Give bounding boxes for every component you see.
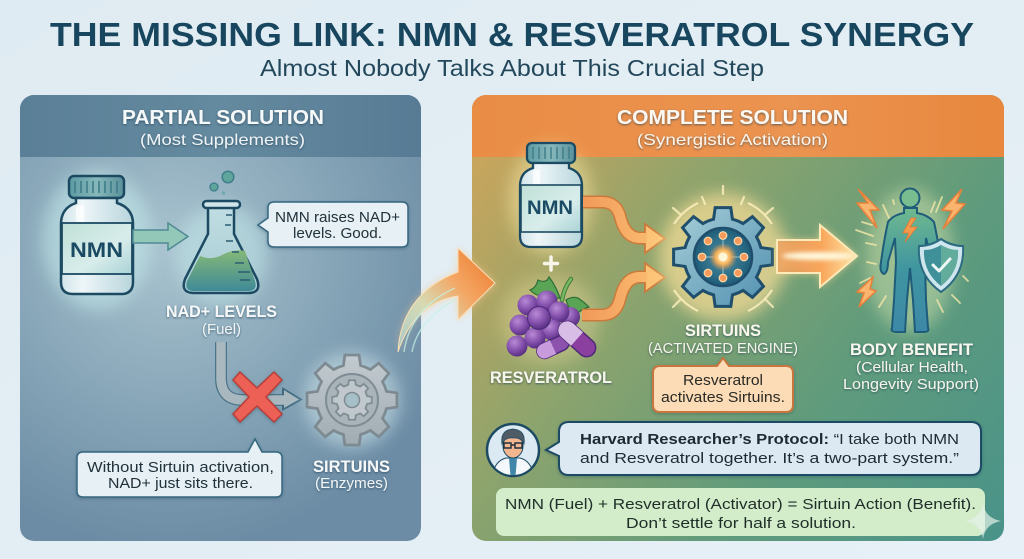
arrow: partial to complete solution bbox=[398, 248, 497, 352]
callout: without sirtuin activation: NAD+ just sits there. bbox=[108, 476, 253, 492]
sparkle bbox=[965, 503, 1001, 539]
callout: Harvard researcher's protocol: Harvard Researcher’s Protocol: “I take both NMN bbox=[580, 431, 959, 448]
panel header: complete solution bbox=[472, 95, 1004, 157]
arrow: NMN to sirtuins bbox=[583, 202, 665, 253]
callout: NMN raises NAD+: NMN raises NAD+ bbox=[275, 210, 400, 226]
icon: body with shield and energy bbox=[856, 188, 968, 332]
label: sirtuins activated engine: (ACTIVATED ENGINE) bbox=[648, 341, 798, 357]
icon: inactive sirtuin gear bbox=[304, 352, 400, 448]
label: body benefit: BODY BENEFIT bbox=[850, 341, 973, 359]
title bbox=[50, 16, 974, 81]
callout: summary equation: Don’t settle for half a solution. bbox=[626, 515, 856, 532]
panel header: complete solution: (Synergistic Activation) bbox=[637, 132, 828, 149]
callout: summary equation: NMN (Fuel) + Resveratrol (Activator) = Sirtuin Action (Benefit). bbox=[505, 496, 976, 513]
arrow: resveratrol to sirtuins bbox=[582, 263, 665, 315]
panel header: partial solution: PARTIAL SOLUTION bbox=[122, 106, 324, 129]
panel: complete solution bbox=[472, 95, 1004, 541]
label: sirtuins enzymes bbox=[313, 458, 390, 492]
callout: NMN raises NAD+ bbox=[258, 202, 408, 247]
panel: partial solution bbox=[20, 95, 421, 541]
label: sirtuins enzymes: SIRTUINS bbox=[313, 458, 390, 476]
icon: NMN bottle: NMN bbox=[527, 198, 573, 219]
label: sirtuins activated engine bbox=[648, 322, 798, 357]
callout: resveratrol activates sirtuins: activates Sirtuins. bbox=[661, 390, 785, 406]
arrow: NMN to NAD+ bbox=[133, 223, 188, 250]
icon: grapes and capsules bbox=[506, 277, 599, 361]
icon: red X bbox=[233, 372, 282, 422]
arrow: sirtuins to body benefit bbox=[777, 225, 857, 287]
label: sirtuins enzymes: (Enzymes) bbox=[315, 476, 388, 492]
label: resveratrol: RESVERATROL bbox=[490, 368, 612, 387]
label: NAD+ levels: NAD+ LEVELS bbox=[166, 303, 277, 321]
arrow: blocked path to sirtuins bbox=[221, 342, 303, 411]
callout: without sirtuin activation bbox=[77, 439, 282, 497]
label: body benefit: Longevity Support) bbox=[843, 377, 979, 393]
callout: without sirtuin activation: Without Sirtuin activation, bbox=[87, 460, 274, 476]
callout: resveratrol activates sirtuins: Resveratrol bbox=[683, 373, 763, 389]
main heading: THE MISSING LINK: NMN & RESVERATROL SYNERGY bbox=[50, 16, 974, 53]
callout: summary equation bbox=[496, 488, 985, 536]
plus sign bbox=[544, 257, 558, 270]
icon: flask with NAD+ bbox=[184, 171, 258, 293]
icon: activated sirtuin gear bbox=[659, 186, 787, 321]
panel header: complete solution: COMPLETE SOLUTION bbox=[617, 106, 848, 129]
label: NAD+ levels: (Fuel) bbox=[202, 322, 241, 338]
callout: resveratrol activates sirtuins bbox=[653, 358, 793, 412]
label: NAD+ levels bbox=[166, 303, 277, 338]
label: body benefit bbox=[843, 341, 979, 393]
subtitle: Almost Nobody Talks About This Crucial Step bbox=[260, 55, 764, 81]
icon: researcher avatar bbox=[487, 424, 539, 478]
icon: NMN bottle bbox=[61, 176, 133, 294]
callout: NMN raises NAD+: levels. Good. bbox=[293, 226, 382, 242]
label: sirtuins activated engine: SIRTUINS bbox=[685, 322, 761, 340]
panel header: partial solution bbox=[20, 95, 421, 157]
callout: Harvard researcher's protocol bbox=[546, 422, 981, 475]
label: body benefit: (Cellular Health, bbox=[856, 360, 968, 376]
panel header: partial solution: (Most Supplements) bbox=[140, 132, 305, 149]
icon: NMN bottle: NMN bbox=[70, 238, 123, 262]
icon: NMN bottle bbox=[520, 143, 582, 247]
callout: Harvard researcher's protocol: and Resveratrol together. It’s a two-part system.” bbox=[580, 450, 959, 467]
